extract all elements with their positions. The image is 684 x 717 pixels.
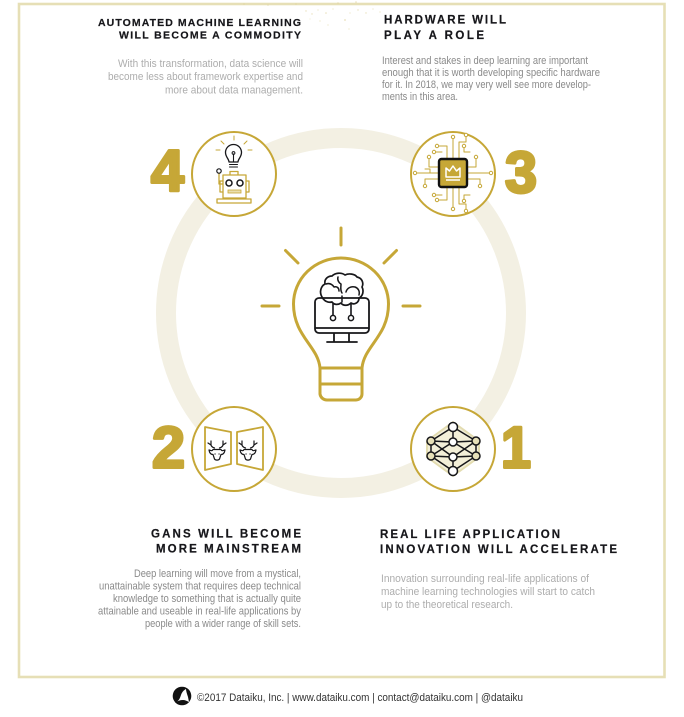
- icon: processor chip with crown: [411, 132, 495, 216]
- body text 2: [98, 568, 301, 630]
- body text 4: [108, 58, 303, 96]
- heading 3: [384, 14, 506, 42]
- icon: Dataiku bird logo: [173, 687, 191, 705]
- section 1: real life application: [380, 529, 617, 611]
- circuit pins: [333, 304, 351, 315]
- body text 4: become less about framework expertise and: [108, 71, 303, 83]
- heading 1: [380, 529, 617, 556]
- gold speckle decoration: [243, 1, 381, 30]
- heading 3: PLAY A ROLE: [384, 30, 484, 42]
- section 2: GANs: [98, 528, 301, 630]
- number 2: 2: [152, 416, 185, 480]
- body text 3: ments in this area.: [382, 91, 458, 103]
- copyright and contact line: ©2017 Dataiku, Inc. | www.dataiku.com | contact@dataiku.com | @dataiku: [197, 692, 523, 704]
- number 1: 1: [501, 416, 531, 480]
- body text 4: With this transformation, data science will: [118, 58, 303, 70]
- body text 2: unattainable system that requires deep technical: [99, 580, 301, 592]
- central light bulb with brain and monitor: [262, 228, 420, 400]
- bulb rays: [262, 228, 420, 306]
- body text 1: [381, 573, 595, 611]
- body text 1: up to the theoretical research.: [381, 599, 513, 611]
- body text 3: enough that it is worth developing specific hardware: [382, 67, 600, 79]
- icon: mirrored deer panels: [192, 407, 276, 491]
- heading 2: [151, 528, 301, 556]
- body text 1: machine learning technologies will start to catch: [381, 586, 595, 598]
- body text 2: people with a wider range of skill sets.: [145, 618, 301, 630]
- heading 4: AUTOMATED MACHINE LEARNING: [98, 17, 301, 29]
- icon: robot with light bulb: [192, 132, 276, 216]
- body text 4: more about data management.: [165, 84, 303, 96]
- number 4: 4: [151, 138, 184, 204]
- monitor: [315, 298, 369, 342]
- heading 4: [98, 17, 301, 42]
- heading 2: GANS WILL BECOME: [151, 528, 301, 540]
- body text 2: attainable and useable in real-life applications by: [98, 606, 301, 618]
- section 3: hardware: [382, 14, 600, 103]
- body text 3: for it. In 2018, we may very well see more develop-: [382, 79, 591, 91]
- section 4: automated machine learning: [98, 17, 303, 96]
- icon: neural network: [411, 407, 495, 491]
- heading 3: HARDWARE WILL: [384, 14, 506, 26]
- bulb outline: [294, 258, 388, 400]
- large ring: [166, 138, 516, 488]
- number 3: 3: [505, 140, 537, 206]
- body text 1: Innovation surrounding real-life applications of: [381, 573, 590, 585]
- heading 1: REAL LIFE APPLICATION: [380, 529, 560, 541]
- heading 4: WILL BECOME A COMMODITY: [119, 30, 301, 42]
- body text 3: [382, 55, 600, 103]
- body text 2: Deep learning will move from a mystical,: [134, 568, 301, 580]
- footer: [173, 687, 523, 705]
- heading 1: INNOVATION WILL ACCELERATE: [380, 544, 617, 556]
- heading 2: MORE MAINSTREAM: [156, 544, 301, 556]
- body text 2: knowledge to something that is actually quite: [113, 593, 301, 605]
- body text 3: Interest and stakes in deep learning are important: [382, 55, 588, 67]
- brain: [321, 273, 363, 305]
